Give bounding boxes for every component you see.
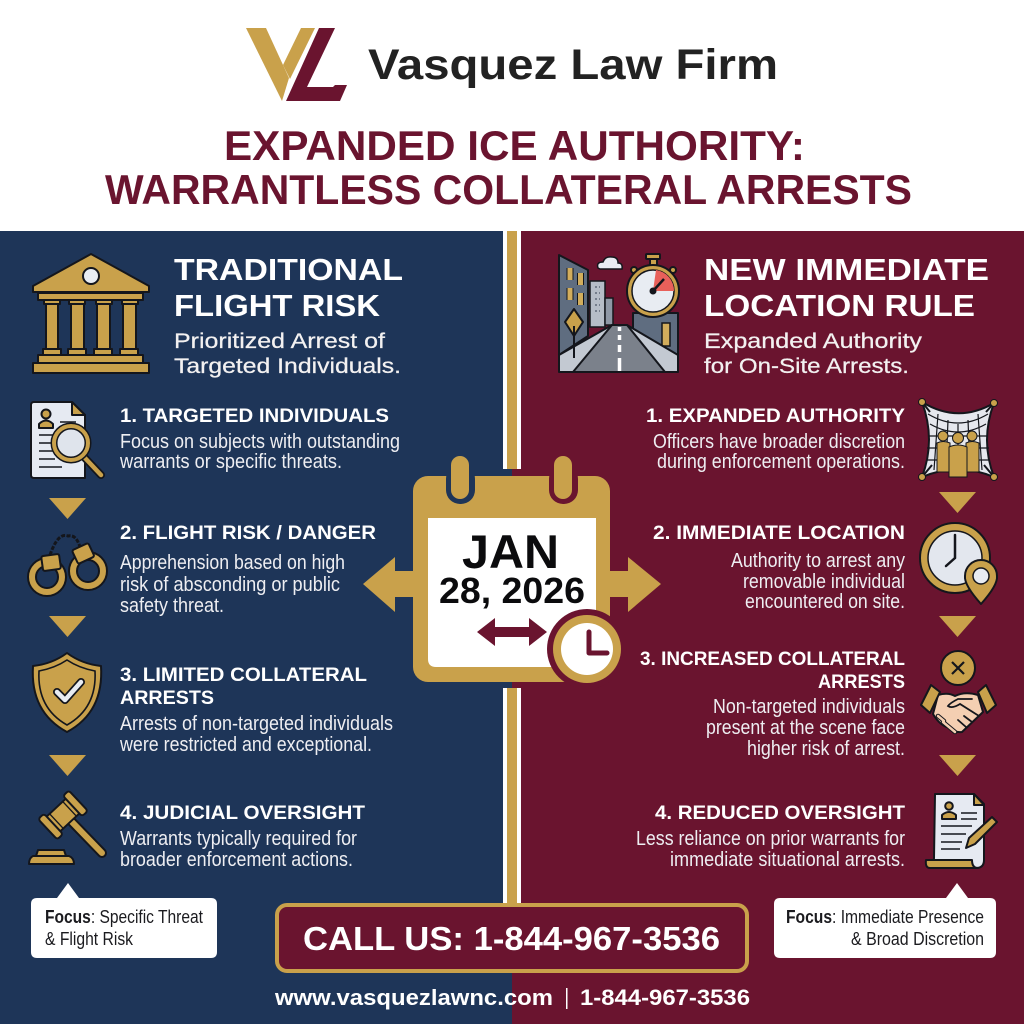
item 4: 4. REDUCED OVERSIGHT (655, 802, 905, 824)
calendar page (428, 518, 596, 667)
callout: left focus: Focus: Specific Threat (45, 907, 203, 927)
arrow down (49, 498, 86, 519)
arrow: right (600, 557, 661, 612)
item 4: 4. JUDICIAL OVERSIGHT (120, 802, 365, 824)
icon: document with magnifier (31, 402, 101, 478)
arrow down (939, 616, 976, 637)
icon: gavel (29, 790, 102, 864)
heading (704, 252, 989, 378)
item 2: risk of absconding or public (120, 574, 340, 596)
arrow down (939, 492, 976, 513)
item 4: immediate situational arrests. (670, 849, 905, 871)
icon: signed document (926, 794, 997, 868)
header: logo and title (105, 28, 912, 213)
item 2: removable individual (743, 571, 905, 593)
item 1: 1. TARGETED INDIVIDUALS (120, 405, 389, 427)
heading: Expanded Authority (704, 329, 922, 353)
item 1: during enforcement operations. (657, 451, 905, 473)
item 3 (119, 664, 393, 756)
calendar body (413, 476, 610, 682)
item 1 (119, 405, 400, 473)
item 1: Focus on subjects with outstanding (120, 431, 400, 453)
item 1: 1. EXPANDED AUTHORITY (646, 405, 905, 427)
logo mark (246, 28, 347, 101)
binding ring left (446, 456, 475, 504)
item 2: Apprehension based on high (120, 552, 345, 574)
item 2 (120, 522, 376, 617)
icon: shield with check (33, 653, 101, 732)
icon: people in net (918, 398, 998, 480)
item 3: ARRESTS (818, 671, 905, 693)
item 4: broader enforcement actions. (120, 849, 353, 871)
callout: right focus (774, 883, 996, 958)
item 3: Arrests of non-targeted individuals (120, 713, 393, 735)
item 1: Officers have broader discretion (653, 431, 905, 453)
center calendar (363, 456, 661, 689)
binding ring right (549, 456, 578, 504)
double arrow (477, 618, 547, 646)
item 2: encountered on site. (745, 591, 905, 613)
item 4: Warrants typically required for (120, 828, 357, 850)
item 3: 3. LIMITED COLLATERAL (120, 664, 367, 686)
date: JAN (462, 525, 559, 578)
callout: right focus: & Broad Discretion (851, 929, 984, 949)
heading: NEW IMMEDIATE (704, 252, 989, 287)
clock badge (547, 609, 627, 689)
item 3: ARRESTS (120, 687, 214, 709)
arrow: left (363, 557, 420, 612)
icon: courthouse (33, 254, 149, 373)
item 2: 2. FLIGHT RISK / DANGER (120, 522, 376, 544)
item 4: Less reliance on prior warrants for (636, 828, 905, 850)
title: EXPANDED ICE AUTHORITY: (224, 122, 805, 169)
icon: handshake with x (921, 651, 996, 732)
item 3: Non-targeted individuals (713, 696, 905, 718)
icon: city street with stopwatch (559, 254, 679, 372)
item 3: 3. INCREASED COLLATERAL (640, 648, 905, 670)
footer contact: 1-844-967-3536 (580, 985, 750, 1010)
callout: left focus: & Flight Risk (45, 929, 134, 949)
item 3 (640, 648, 905, 760)
panel: traditional flight risk background (0, 231, 512, 1024)
callout: right focus: Focus: Immediate Presence (786, 907, 984, 927)
item 4 (636, 802, 905, 871)
item 3: were restricted and exceptional. (119, 734, 372, 756)
icon: clock with location pin (920, 523, 997, 604)
footer contact: www.vasquezlawnc.com (274, 985, 553, 1010)
title: WARRANTLESS COLLATERAL ARRESTS (105, 166, 912, 213)
item 1 (646, 405, 905, 473)
right column: new immediate location rule (559, 252, 998, 958)
item 3: higher risk of arrest. (747, 738, 905, 760)
left column: traditional flight risk (29, 252, 403, 958)
date (439, 525, 585, 611)
arrow down (939, 755, 976, 776)
item 1: warrants or specific threats. (119, 451, 342, 473)
item 3: present at the scene face (706, 717, 905, 739)
logo wordmark: Vasquez Law Firm (368, 41, 778, 89)
panel: new immediate location rule background (512, 231, 1024, 1024)
heading (174, 252, 403, 378)
callout: left focus (31, 883, 217, 958)
heading: for On-Site Arrests. (704, 354, 909, 378)
footer contact (274, 985, 750, 1010)
title (105, 122, 912, 213)
icon: handcuffs (32, 535, 103, 592)
heading: LOCATION RULE (704, 288, 975, 323)
item 4 (120, 802, 365, 871)
arrow down (49, 616, 86, 637)
call to action: CALL US: 1-844-967-3536 (303, 920, 720, 957)
item 2 (653, 522, 905, 613)
heading: FLIGHT RISK (174, 288, 381, 323)
heading: TRADITIONAL (174, 252, 403, 287)
central divider (503, 231, 521, 906)
item 2: safety threat. (120, 595, 224, 617)
item 2: 2. IMMEDIATE LOCATION (653, 522, 905, 544)
heading: Prioritized Arrest of (174, 329, 385, 353)
item 2: Authority to arrest any (731, 550, 905, 572)
call to action (277, 905, 747, 971)
arrow down (49, 755, 86, 776)
heading: Targeted Individuals. (174, 354, 401, 378)
date: 28, 2026 (439, 570, 585, 611)
